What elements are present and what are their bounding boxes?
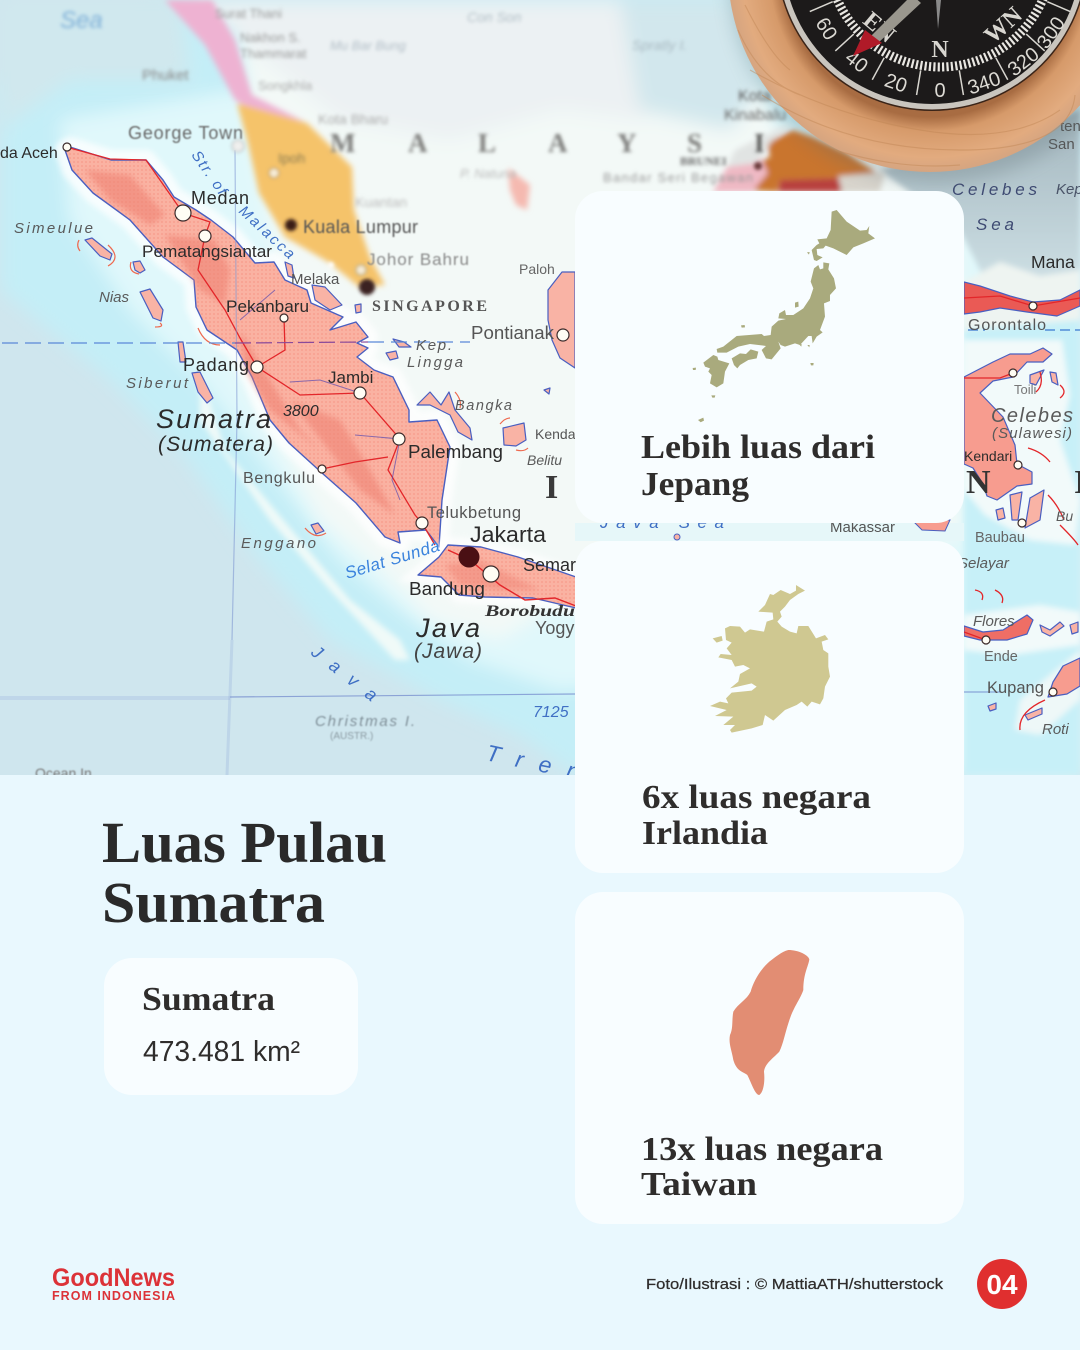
map labels out of focus: Johor Bahru xyxy=(367,250,469,269)
logo: GoodNews from Indonesia: FROM INDONESIA xyxy=(52,1289,175,1303)
map roads on sumatra xyxy=(70,148,435,545)
map labels in focus: Belitu xyxy=(527,452,562,468)
map labels in focus: Baubau xyxy=(975,530,1025,546)
map labels in focus: Telukbetung xyxy=(427,504,521,522)
map photo background: Thammarat xyxy=(240,46,307,61)
map coastal reef marks xyxy=(78,240,528,536)
map photo background: Kota xyxy=(738,88,771,105)
page number: 04 xyxy=(986,1269,1018,1300)
map sliver between cards xyxy=(575,520,964,541)
compass cardinal letters: WN xyxy=(980,2,1028,49)
compass wooden ring xyxy=(728,0,1080,172)
map labels in focus: Roti xyxy=(1042,721,1069,738)
map photo background: S xyxy=(687,128,702,158)
map labels in focus: Jambi xyxy=(328,368,373,387)
map photo background: Spratly I. xyxy=(632,37,687,53)
card text: Taiwan xyxy=(641,1131,883,1203)
map labels in focus: Melaka xyxy=(291,271,340,288)
map labels in focus: San xyxy=(1048,136,1075,153)
logo: GoodNews from Indonesia xyxy=(52,1264,175,1303)
map photo background: A xyxy=(548,128,568,158)
map labels in focus: Kenda xyxy=(535,426,576,442)
map labels in focus: Gorontalo xyxy=(968,317,1046,334)
map labels in focus: Siberut xyxy=(126,375,189,392)
map labels in focus: Borobudu xyxy=(484,603,576,620)
map photo background: Con Son xyxy=(467,9,522,25)
map labels in focus: Sumatra xyxy=(156,404,271,434)
map labels in focus: Java xyxy=(415,613,480,643)
map photo background: Sea xyxy=(60,7,103,34)
card: Ireland xyxy=(575,541,964,873)
panel: Sumatra area xyxy=(104,958,358,1095)
map labels in focus: Kendari xyxy=(964,448,1012,464)
compass needle xyxy=(853,0,941,56)
compass degree numbers: 0 xyxy=(934,80,946,102)
title xyxy=(102,810,387,935)
map labels in focus: Malacca xyxy=(235,202,298,263)
map labels in focus: Pontianak xyxy=(471,323,555,343)
map labels in focus: N xyxy=(966,464,991,501)
compass degree numbers: 320 xyxy=(1004,43,1044,81)
compass degree numbers: 20 xyxy=(882,70,910,98)
card text: Ireland: 6x luas negara xyxy=(642,779,871,816)
compass cardinal letters: EN xyxy=(858,7,901,49)
map labels out of focus: George Town xyxy=(128,123,243,143)
compass degree numbers: 340 xyxy=(965,68,1004,99)
card: Taiwan xyxy=(575,892,964,1224)
map land: sulawesi and eastern islands xyxy=(964,282,1080,720)
map labels in focus: Kep. xyxy=(416,337,452,354)
map photo background: Nakhon S. xyxy=(240,30,301,45)
title: Luas Pulau xyxy=(102,810,387,875)
map land: sumatra and java xyxy=(65,147,576,608)
map labels in focus: Celebes xyxy=(991,405,1073,427)
map photo background: A xyxy=(408,128,428,158)
map labels in focus: (Jawa) xyxy=(414,640,482,663)
map labels in focus: Nias xyxy=(99,289,130,306)
map sliver between cards: Makassar xyxy=(830,519,895,536)
map labels in focus: Ende xyxy=(984,649,1018,665)
compass major ticks xyxy=(810,2,1070,95)
map labels in focus: Padang xyxy=(183,355,249,375)
map photo background: Kuantan xyxy=(355,194,407,210)
map sliver between cards: Java Sea xyxy=(599,513,724,532)
map labels in focus: da Aceh xyxy=(0,145,58,162)
compass degree numbers: 60 xyxy=(811,14,841,44)
map labels in focus: Medan xyxy=(191,188,249,208)
map photo background: Bandar Seri Begawan xyxy=(603,170,753,185)
map labels in focus: (Sumatera) xyxy=(158,433,273,456)
compass xyxy=(728,0,1080,184)
map labels in focus: Semar xyxy=(523,555,576,575)
map labels in focus: Palembang xyxy=(408,442,503,462)
map labels in focus: Lingga xyxy=(407,354,463,371)
map photo background: Mu Bar Bung xyxy=(330,38,407,53)
panel heading: Sumatra xyxy=(142,981,275,1018)
map labels in focus: SINGAPORE xyxy=(372,298,487,315)
map labels in focus: Bandung xyxy=(409,579,485,599)
page number xyxy=(977,1259,1027,1309)
icon: map of Japan xyxy=(693,210,875,422)
map labels in focus: Pematangsiantar xyxy=(142,243,273,261)
card text: Japan xyxy=(641,429,875,503)
map labels in focus: I xyxy=(545,469,558,506)
compass cardinal letters: N xyxy=(931,37,949,63)
map labels in focus: Mana xyxy=(1031,252,1075,272)
map labels in focus: Bu xyxy=(1056,508,1073,524)
compass cardinal letters xyxy=(862,6,1022,57)
map labels in focus: Selayar xyxy=(958,555,1010,572)
compass degree numbers xyxy=(817,17,1064,97)
map land: malaysia and thailand xyxy=(165,0,885,287)
map labels in focus: T r e n xyxy=(484,739,582,785)
map labels in focus: J a v a xyxy=(307,641,381,705)
map photo background: Kinabalu xyxy=(724,107,786,124)
map photo background: M xyxy=(330,128,355,158)
map photo background xyxy=(0,0,1080,785)
card text: Japan: Lebih luas dari xyxy=(641,429,875,466)
compass tick ring xyxy=(828,0,1052,67)
map labels in focus: Enggano xyxy=(241,535,316,552)
map labels out of focus: Ocean In xyxy=(35,765,92,781)
photo credit: Foto/Ilustrasi : © MattiaATH/shutterstock xyxy=(646,1276,944,1293)
card text: Ireland xyxy=(642,779,871,852)
map labels in focus: Pekanbaru xyxy=(226,298,309,316)
card text: Ireland: Irlandia xyxy=(642,815,768,852)
title: Sumatra xyxy=(102,870,325,935)
map photo background: Surat Thani xyxy=(215,6,282,21)
map labels out of focus: (AUSTR.) xyxy=(330,731,373,742)
map labels in focus: Celebes xyxy=(952,180,1038,199)
map labels in focus: Simeulue xyxy=(14,220,93,237)
map labels in focus: 7125 xyxy=(533,704,569,721)
compass shadow xyxy=(729,0,1080,184)
map labels in focus: Bengkulu xyxy=(243,470,315,487)
map labels in focus: Bangka xyxy=(455,398,512,414)
map labels out of focus: Christmas I. xyxy=(315,713,415,730)
card: Japan xyxy=(575,191,964,523)
compass silver bezel xyxy=(776,0,1080,111)
map labels in focus: Toili xyxy=(1014,382,1037,397)
icon: map of Ireland xyxy=(710,585,830,733)
map labels in focus: (Sulawesi) xyxy=(992,425,1072,442)
map labels in focus: Str. of xyxy=(188,148,231,200)
map labels in focus: Sea xyxy=(976,215,1014,234)
map photo background: P. Natuna xyxy=(460,166,516,181)
map photo background: L xyxy=(478,128,496,158)
panel value: 473.481 km² xyxy=(143,1036,300,1068)
map photo background: I xyxy=(754,128,765,158)
map labels in focus: Selat Sunda xyxy=(343,536,442,583)
map photo background: Y xyxy=(617,128,636,158)
map islands near sumatra xyxy=(85,238,575,534)
icon: map of Taiwan xyxy=(730,950,809,1095)
compass degree numbers: 40 xyxy=(841,47,872,78)
map labels out of focus xyxy=(35,123,469,781)
map labels in focus: Flores xyxy=(973,613,1015,630)
map photo background: Songkhla xyxy=(258,78,313,93)
card text: Taiwan: Taiwan xyxy=(641,1166,757,1203)
map grid lines xyxy=(0,150,1080,775)
card text: Taiwan: 13x luas negara xyxy=(641,1131,883,1168)
map photo background: Phuket xyxy=(142,67,190,84)
logo: GoodNews from Indonesia: GoodNews xyxy=(52,1264,175,1292)
map labels in focus: Yogy xyxy=(535,618,574,638)
map photo background: Kota Bharu xyxy=(318,111,388,127)
compass degree numbers: 300 xyxy=(1033,13,1070,53)
map labels in focus: Paloh xyxy=(519,261,555,277)
map labels in focus: 3800 xyxy=(283,403,319,420)
map photo background: Ipoh xyxy=(278,150,305,166)
map labels in focus: Jakarta xyxy=(470,522,547,547)
map labels out of focus: Kuala Lumpur xyxy=(303,217,418,237)
map settlements xyxy=(63,143,1057,696)
map labels in focus: Kupang xyxy=(987,679,1044,697)
map labels in focus xyxy=(0,118,1080,785)
map photo background: BRUNEI xyxy=(680,154,727,168)
map roads on sulawesi and reef marks xyxy=(964,296,1080,730)
card text: Japan: Jepang xyxy=(641,466,749,503)
